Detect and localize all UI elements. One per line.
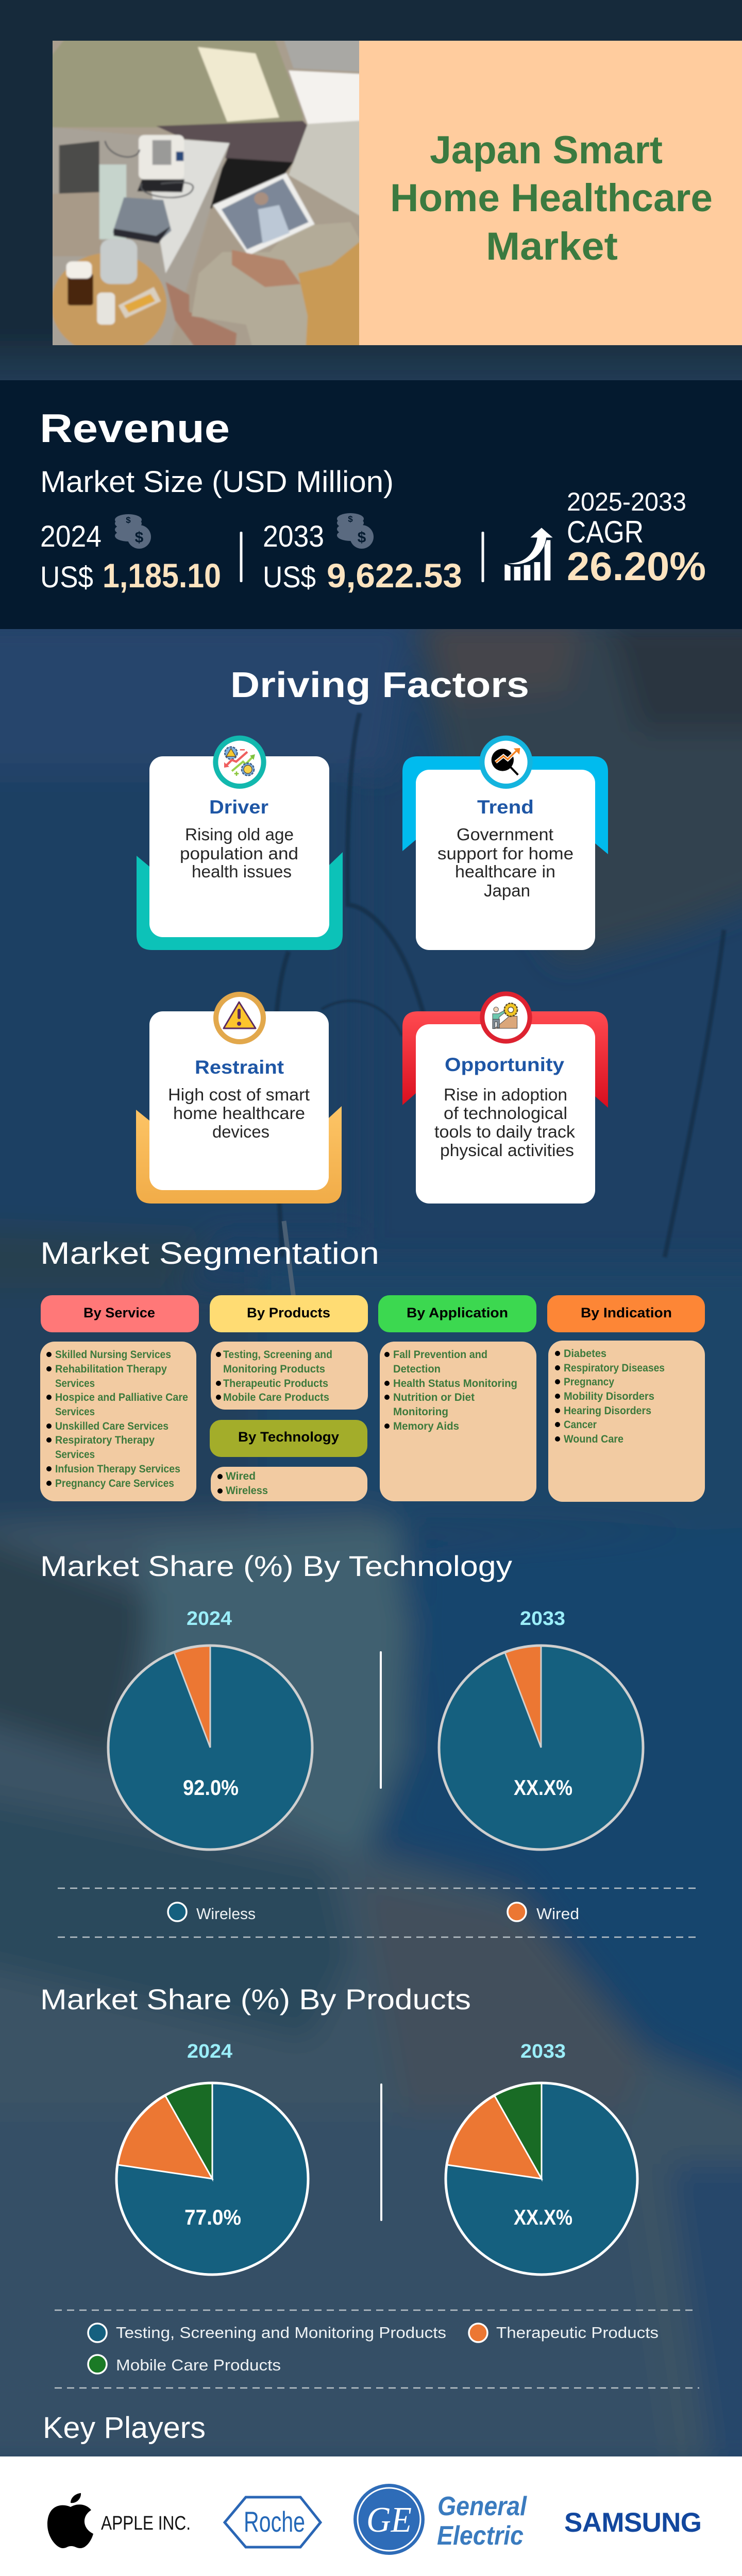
pie chart: products 2033: XX.X% xyxy=(514,2205,572,2229)
icon: coins 2024: $ xyxy=(126,515,131,525)
legend: products: Mobile Care Products xyxy=(116,2356,281,2374)
2033 value: 2033 xyxy=(263,520,324,553)
service list: Infusion Therapy Services xyxy=(55,1463,180,1475)
pie chart: products 2024: 77.0% xyxy=(184,2205,241,2229)
logo: general electric xyxy=(353,2484,527,2555)
application list: Nutrition or Diet xyxy=(393,1392,475,1403)
panel: by products: By Products xyxy=(247,1305,330,1320)
divider xyxy=(380,1651,382,1789)
pie chart: products 2024 xyxy=(116,2041,308,2275)
technology list xyxy=(217,1470,268,1497)
driver title: Driver xyxy=(209,796,268,818)
trend title: Trend xyxy=(477,796,534,818)
trend text: Japan xyxy=(484,881,530,900)
restraint text: home healthcare xyxy=(173,1104,305,1123)
restraint text xyxy=(168,1085,310,1141)
legend: products: Testing, Screening and Monitoring Products xyxy=(116,2324,446,2342)
pie chart: technology 2033: 2033 xyxy=(520,1608,565,1630)
2033 value: US$ xyxy=(263,561,316,594)
service list: Respiratory Therapy xyxy=(55,1434,155,1446)
title panel: Market xyxy=(486,225,618,268)
legend: technology xyxy=(58,1888,700,1937)
application list xyxy=(384,1349,517,1432)
service list: Services xyxy=(55,1378,95,1389)
panel: opportunity xyxy=(402,991,608,1204)
opportunity text: of technological xyxy=(444,1104,567,1123)
panel: by products xyxy=(210,1295,368,1410)
trend text xyxy=(437,825,574,900)
trend text: support for home xyxy=(437,844,574,863)
panel: by indication: By Indication xyxy=(581,1305,672,1320)
pie chart: technology 2024 xyxy=(108,1608,312,1850)
legend: technology: Wireless xyxy=(196,1905,256,1923)
logo: apple: APPLE INC. xyxy=(101,2513,191,2534)
pie chart: technology 2024: 2024 xyxy=(187,1608,232,1630)
logo: general electric: GE xyxy=(366,2500,412,2540)
2033 value: 9,622.53 xyxy=(327,556,462,595)
service list: Services xyxy=(55,1406,95,1418)
2024 value: 1,185.10 xyxy=(103,556,221,595)
application list: Detection xyxy=(393,1363,441,1375)
products list: Testing, Screening and xyxy=(223,1349,332,1361)
legend: products: Therapeutic Products xyxy=(496,2324,659,2342)
panel: by application xyxy=(378,1295,536,1501)
opportunity text: physical activities xyxy=(440,1141,574,1160)
2024 value: 2024 xyxy=(40,520,102,553)
technology list: Wireless xyxy=(226,1485,268,1497)
market size label: Market Size (USD Million) xyxy=(40,465,394,499)
indication list xyxy=(555,1348,665,1445)
logo: general electric: Electric xyxy=(437,2521,524,2551)
technology list: Wired xyxy=(226,1470,256,1482)
icon: trend xyxy=(479,736,533,789)
indication list: Hearing Disorders xyxy=(564,1405,651,1417)
driver text: health issues xyxy=(192,862,292,881)
heading: market share by products: Market Share (%) By Products xyxy=(40,1983,471,2015)
indication list: Wound Care xyxy=(564,1433,623,1445)
heading: driving factors: Driving Factors xyxy=(230,665,529,705)
panel: key players logos xyxy=(0,2456,742,2576)
icon: coins 2024: $ xyxy=(135,529,144,546)
service list: Hospice and Palliative Care xyxy=(55,1392,188,1403)
panel: trend xyxy=(402,736,608,950)
heading: market segmentation: Market Segmentation xyxy=(40,1236,379,1270)
products list: Monitoring Products xyxy=(223,1363,325,1375)
service list: Services xyxy=(55,1449,95,1461)
application list: Health Status Monitoring xyxy=(393,1378,517,1389)
CAGR: 26.20% xyxy=(567,544,706,589)
indication list: Diabetes xyxy=(564,1348,606,1360)
icon: restraint xyxy=(213,992,266,1044)
legend: products xyxy=(55,2310,699,2388)
pie chart: products 2024: 2024 xyxy=(187,2041,232,2062)
products list xyxy=(216,1349,332,1403)
restraint text: High cost of smart xyxy=(168,1085,310,1104)
header banner xyxy=(53,41,742,345)
indication list: Respiratory Diseases xyxy=(564,1362,665,1374)
logo: apple xyxy=(47,2493,191,2548)
trend text: Government xyxy=(457,825,553,844)
restraint title: Restraint xyxy=(195,1057,284,1078)
pie chart: products 2033: 2033 xyxy=(520,2041,566,2062)
title panel: Japan Smart xyxy=(430,128,663,172)
application list: Fall Prevention and xyxy=(393,1349,487,1361)
2024 value xyxy=(40,520,221,595)
pie chart: technology 2033: XX.X% xyxy=(514,1775,572,1800)
service list xyxy=(46,1349,188,1489)
icon: coins 2033: $ xyxy=(358,529,366,546)
CAGR: CAGR xyxy=(567,515,644,549)
pie chart: technology 2033 xyxy=(439,1608,643,1850)
indication list: Mobility Disorders xyxy=(564,1391,654,1402)
application list: Monitoring xyxy=(393,1406,448,1418)
2033 value xyxy=(263,520,462,595)
icon: coins 2033: $ xyxy=(348,514,353,524)
service list: Rehabilitation Therapy xyxy=(55,1363,167,1375)
heading: key players: Key Players xyxy=(43,2411,206,2445)
icon: coins 2033 xyxy=(337,513,374,549)
divider xyxy=(481,532,484,582)
driver text xyxy=(180,825,298,881)
service list: Pregnancy Care Services xyxy=(55,1478,174,1489)
products list: Mobile Care Products xyxy=(223,1392,329,1403)
title panel xyxy=(359,41,742,345)
panel: restraint xyxy=(136,992,342,1204)
service list: Skilled Nursing Services xyxy=(55,1349,171,1361)
application list: Memory Aids xyxy=(393,1420,459,1432)
panel: by application: By Application xyxy=(407,1305,508,1320)
title panel: Home Healthcare xyxy=(390,176,713,220)
icon: opportunity xyxy=(480,991,532,1044)
indication list: Cancer xyxy=(564,1419,597,1431)
panel: by service xyxy=(40,1295,199,1501)
panel: driver xyxy=(137,736,343,950)
opportunity title: Opportunity xyxy=(445,1054,564,1075)
logo: roche: Roche xyxy=(244,2505,305,2538)
icon: driver xyxy=(213,736,266,789)
revenue heading: Revenue xyxy=(40,405,230,451)
logo: roche xyxy=(225,2497,321,2547)
panel: by technology: By Technology xyxy=(238,1429,339,1445)
divider xyxy=(240,532,242,582)
panel: by indication xyxy=(547,1295,705,1502)
logo: samsung: SAMSUNG xyxy=(564,2507,702,2538)
icon: growth chart arrow xyxy=(503,528,553,581)
hero photo: home blood pressure monitor and tablet video consult xyxy=(53,41,359,345)
panel: by technology xyxy=(210,1420,367,1501)
legend: technology: Wired xyxy=(536,1905,579,1923)
CAGR xyxy=(567,487,706,589)
revenue panel xyxy=(0,380,742,629)
opportunity text: tools to daily track xyxy=(434,1122,576,1141)
opportunity text xyxy=(434,1085,576,1160)
service list: Unskilled Care Services xyxy=(55,1420,168,1432)
driver text: Rising old age xyxy=(185,825,294,844)
pie chart: products 2033 xyxy=(446,2041,637,2275)
icon: coins 2024 xyxy=(115,514,151,549)
divider xyxy=(380,2083,382,2221)
pie chart: technology 2024: 92.0% xyxy=(183,1775,239,1800)
CAGR: 2025-2033 xyxy=(567,487,686,516)
2024 value: US$ xyxy=(40,561,93,594)
driver text: population and xyxy=(180,844,298,863)
trend text: healthcare in xyxy=(455,862,555,881)
logo: general electric: General xyxy=(437,2492,527,2521)
panel: by service: By Service xyxy=(83,1305,155,1320)
products list: Therapeutic Products xyxy=(223,1378,328,1389)
opportunity text: Rise in adoption xyxy=(444,1085,567,1104)
restraint text: devices xyxy=(212,1122,269,1141)
indication list: Pregnancy xyxy=(564,1376,614,1388)
heading: market share by technology: Market Share (%) By Technology xyxy=(40,1550,512,1582)
